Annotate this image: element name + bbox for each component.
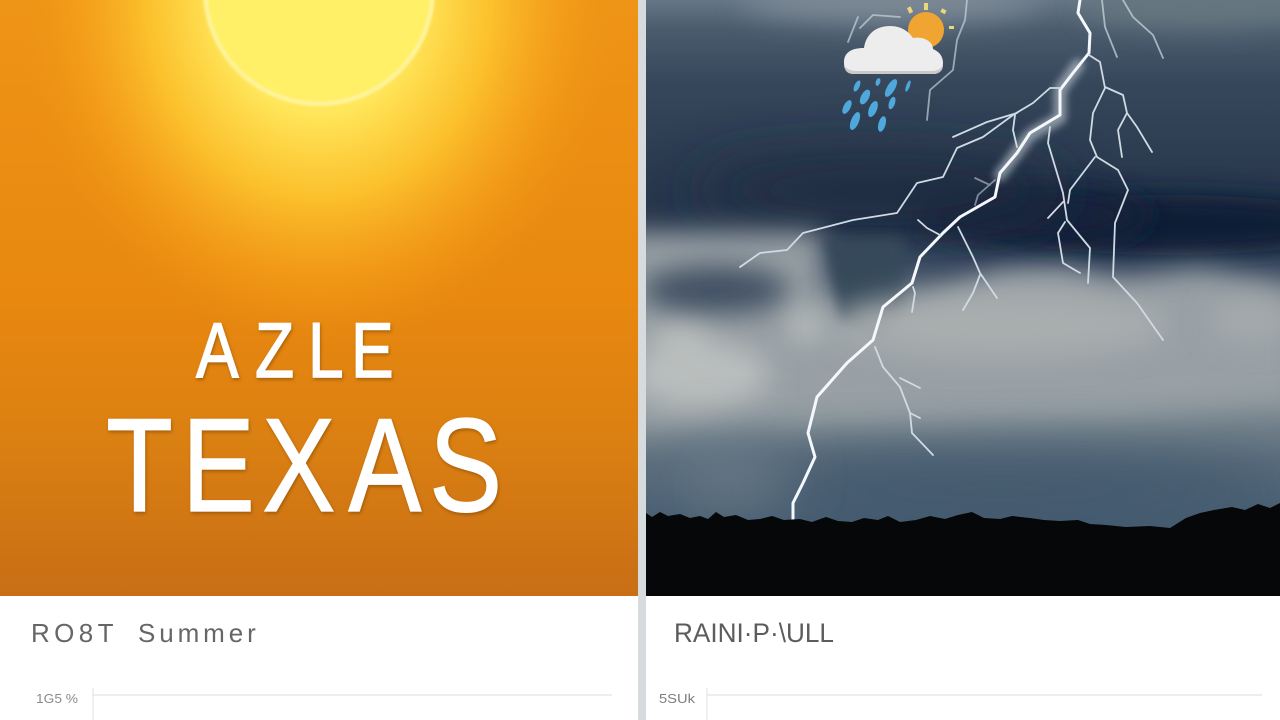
title: Azle Texas xyxy=(106,307,502,539)
panel: rainfall chart heading and axis xyxy=(659,618,1262,720)
panel: storm photo xyxy=(620,0,1280,596)
title: Azle Texas: TEXAS xyxy=(106,391,502,539)
panel: summer chart heading and axis xyxy=(31,618,612,720)
sun rays xyxy=(907,3,954,29)
axis label: 1G5 % xyxy=(36,691,78,706)
storm cloud band xyxy=(620,232,1280,520)
heading: RAINI·P·\ULL xyxy=(674,618,834,648)
title: Azle Texas: AZLE xyxy=(196,307,394,394)
chart axes xyxy=(707,688,1262,720)
chart axes xyxy=(93,688,612,720)
heading: Summer xyxy=(138,618,260,648)
cloud xyxy=(844,26,943,74)
axis label: 5SUk xyxy=(659,691,696,706)
icon: sun disc xyxy=(205,0,433,104)
lightning bolt xyxy=(740,0,1163,522)
tree line silhouette xyxy=(646,503,1280,596)
heading: RO8T xyxy=(31,618,118,648)
panel: hot summer sun xyxy=(0,0,638,596)
center divider xyxy=(638,0,646,720)
main strike xyxy=(793,0,1090,522)
icon: weather cloud, sun and rain xyxy=(840,3,954,133)
rain drops xyxy=(840,77,912,133)
side branches xyxy=(740,0,1163,455)
sun xyxy=(908,12,944,48)
